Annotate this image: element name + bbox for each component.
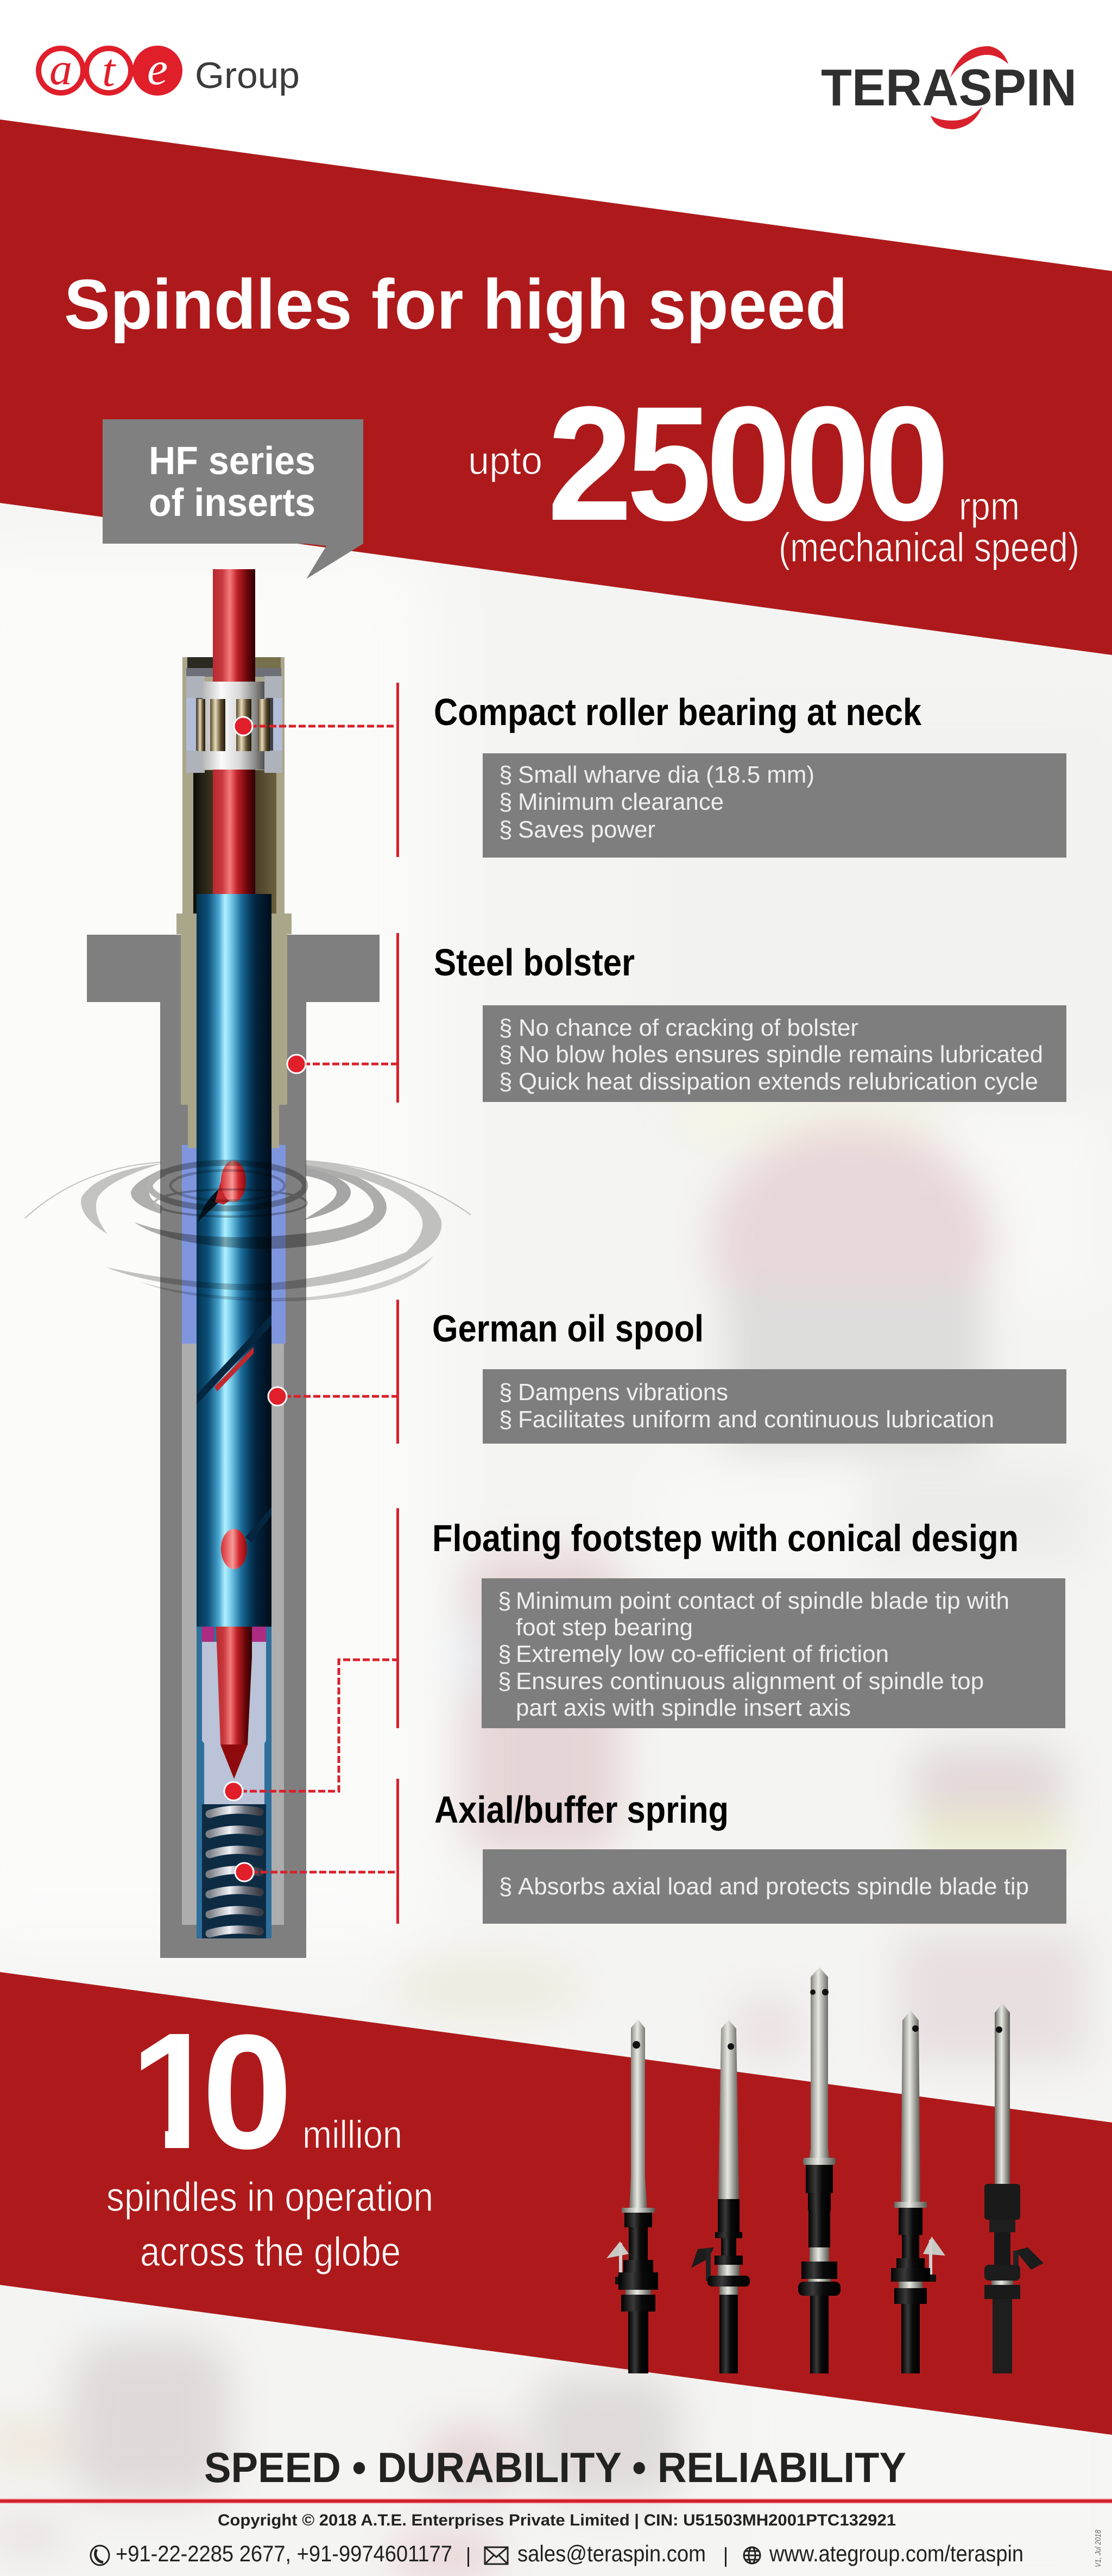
panel: floating footstep: § [498, 1588, 511, 1614]
logo: ate Group [36, 42, 300, 96]
panel: floating footstep: foot step bearing [516, 1614, 693, 1641]
panel: german oil spool: Facilitates uniform and continuous lubrication [518, 1406, 994, 1433]
panel: floating footstep: Minimum point contact of spindle blade tip with [516, 1588, 1009, 1614]
panel: compact roller bearing: § [499, 761, 512, 788]
logo: TeraSpin: TERASPIN [821, 59, 1077, 117]
panel: compact roller bearing: Saves power [518, 816, 655, 843]
spindle 2 [691, 2020, 750, 2373]
red band top [0, 119, 1112, 655]
panel: german oil spool: German oil spool [432, 1307, 704, 1350]
contact row: sales@teraspin.com [517, 2541, 706, 2566]
tagline: SPEED • DURABILITY • RELIABILITY [204, 2443, 906, 2491]
ripple rings [25, 1161, 471, 1301]
lower light-grey cavity [182, 1344, 284, 1925]
panel: compact roller bearing [434, 691, 1066, 858]
panel: steel bolster: No chance of cracking of bolster [519, 1015, 858, 1041]
title: Spindles for high speed [64, 264, 848, 344]
panel: german oil spool [432, 1307, 1066, 1444]
oil holes and grooves [197, 1161, 271, 1569]
panel: axial spring: § [499, 1873, 512, 1900]
stat: 10 million: across the globe [140, 2229, 401, 2275]
callout: HF series of inserts [103, 419, 363, 579]
leader: oil spool [268, 1300, 399, 1444]
contact row: +91-22-2285 2677, +91-9974601177 [116, 2541, 452, 2566]
panel: floating footstep [432, 1517, 1065, 1728]
leader: axial spring [235, 1779, 399, 1924]
red band bottom [0, 1972, 1112, 2435]
stat: 10 million: spindles in operation [106, 2174, 433, 2220]
speed stat: 25000 [547, 372, 950, 555]
panel: german oil spool: Dampens vibrations [518, 1379, 728, 1406]
logo: ate Group: e [147, 42, 168, 95]
panel: german oil spool: § [499, 1379, 512, 1406]
panel: steel bolster: Steel bolster [434, 941, 635, 984]
icon: phone [91, 2546, 109, 2565]
blue shaft [197, 894, 271, 1627]
panel: floating footstep: part axis with spindle insert axis [516, 1695, 851, 1721]
panel: steel bolster: § [499, 1015, 512, 1041]
panel: compact roller bearing: § [499, 816, 512, 843]
spindle 1 [606, 2019, 658, 2373]
logo: ate Group: t [102, 44, 116, 96]
leader: roller bearing [234, 683, 399, 857]
panel: compact roller bearing: Compact roller bearing at neck [434, 691, 921, 733]
axial spring [202, 1804, 266, 1938]
panel: floating footstep: Ensures continuous alignment of spindle top [516, 1668, 984, 1695]
panel: axial spring: Axial/buffer spring [434, 1788, 729, 1831]
speed stat: upto [468, 439, 542, 483]
logo: ate Group: a [49, 44, 72, 95]
panel: steel bolster: Quick heat dissipation extends relubrication cycle [519, 1068, 1038, 1095]
footstep housing [197, 1627, 271, 1938]
panel: compact roller bearing: Minimum clearance [518, 789, 724, 815]
stat: 10 million [108, 2034, 431, 2275]
contact row [91, 2541, 1023, 2567]
red spindle shaft [213, 569, 255, 895]
stat: 10 million: 1 [130, 1998, 222, 2183]
spindle 3 [798, 1967, 841, 2373]
oil spool sleeves [182, 1145, 286, 1344]
callout: HF series of inserts: HF series [149, 439, 315, 483]
leader: floating footstep [224, 1508, 399, 1800]
speed stat [468, 372, 1079, 571]
panel: floating footstep: Floating footstep with conical design [432, 1517, 1019, 1559]
panel: steel bolster: § [499, 1068, 512, 1095]
panel: german oil spool: § [499, 1406, 512, 1433]
icon: globe [744, 2547, 760, 2564]
speed stat: rpm [959, 485, 1020, 528]
spindle 5 [984, 2003, 1044, 2373]
logo: TeraSpin [821, 46, 1077, 129]
panel: floating footstep: § [498, 1641, 511, 1667]
stat: 10 million: 0 [202, 2000, 293, 2183]
contact row: www.ategroup.com/teraspin [769, 2541, 1023, 2566]
leader: steel bolster [287, 933, 399, 1103]
logo: ate Group: Group [195, 55, 300, 96]
panel: steel bolster [434, 941, 1066, 1102]
copyright: Copyright © 2018 A.T.E. Enterprises Private Limited | CIN: U51503MH2001PTC132921 [218, 2511, 896, 2529]
conical red needle [216, 1627, 252, 1779]
icon: email [485, 2547, 508, 2564]
spindle cross-section diagram [87, 569, 380, 1958]
version note: V1, Jul 2018 [1094, 2529, 1103, 2567]
panel: compact roller bearing: § [499, 789, 512, 815]
spindle products [606, 1967, 1044, 2373]
footstep insert [202, 1642, 266, 1804]
steel bolster tan housing [176, 657, 292, 1148]
panel: axial spring [434, 1788, 1066, 1924]
panel: floating footstep: Extremely low co-efficient of friction [516, 1641, 889, 1667]
stat: 10 million: million [302, 2113, 402, 2157]
inner dark walls [193, 770, 213, 914]
panel: steel bolster: § [499, 1041, 512, 1068]
roller bearing [186, 676, 282, 773]
callout: HF series of inserts: of inserts [149, 481, 315, 525]
housing top recess [186, 657, 281, 677]
panel: compact roller bearing: Small wharve dia (18.5 mm) [518, 761, 814, 788]
panel: steel bolster: No blow holes ensures spindle remains lubricated [519, 1041, 1043, 1068]
panel: floating footstep: § [498, 1668, 511, 1695]
panel: axial spring: Absorbs axial load and protects spindle blade tip [518, 1873, 1029, 1900]
bolster grey body [87, 935, 380, 1958]
spindle 4 [891, 2010, 945, 2373]
